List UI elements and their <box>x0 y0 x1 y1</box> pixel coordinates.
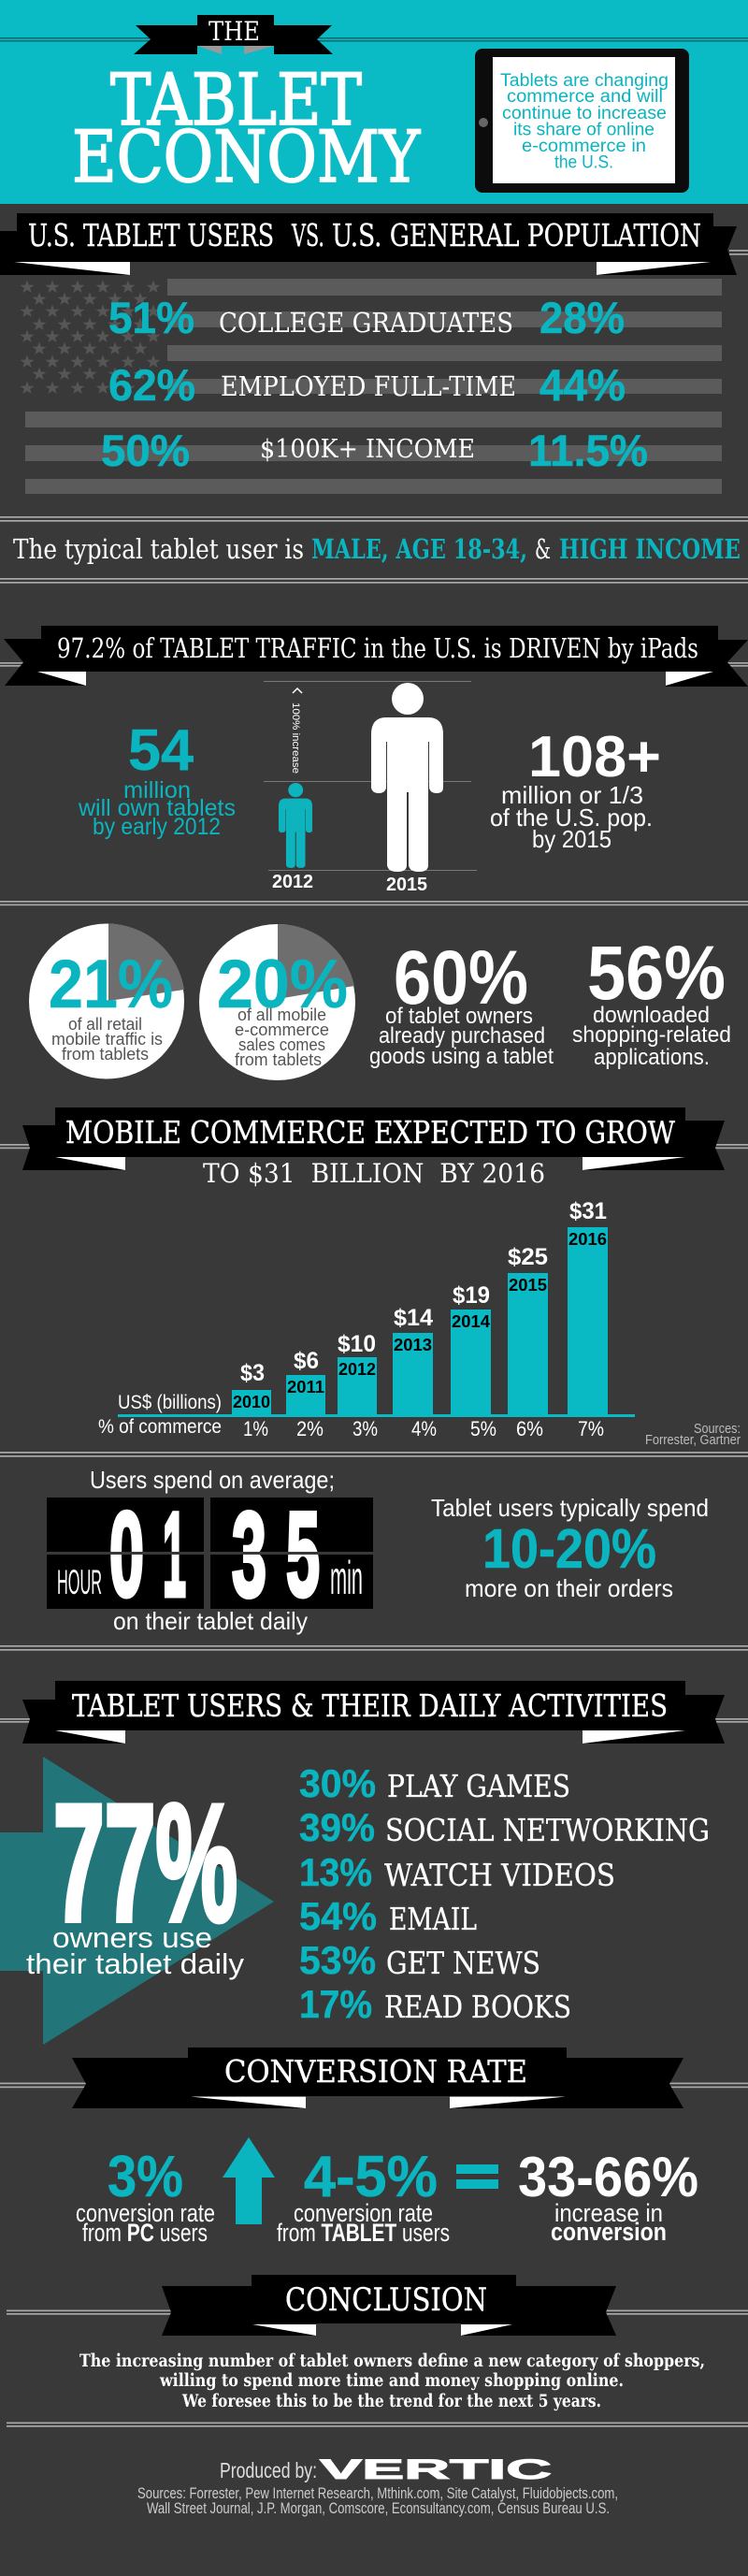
bar 2016: $31 <box>569 1198 607 1224</box>
icon: person 2012 <box>279 783 312 868</box>
stat: college graduates <box>108 293 625 342</box>
order spend panel: Tablet users typically spend <box>431 1494 709 1522</box>
activities list: 30% <box>299 1761 376 1805</box>
stat: PC conversion: conversion rate <box>76 2199 215 2227</box>
bar chart: mobile commerce: 7% <box>578 1417 604 1440</box>
bar 2012: $10 <box>338 1331 376 1357</box>
chart: people growth: 2012 <box>272 872 313 892</box>
arrow with 77%: their tablet daily <box>26 1947 245 1980</box>
bar 2011 <box>286 1348 325 1415</box>
activities list: 13% <box>299 1850 372 1894</box>
stat: conversion increase: 33-66% <box>518 2146 698 2208</box>
chart sources: Sources: <box>694 1421 741 1437</box>
tablet callout: commerce and will <box>507 87 663 107</box>
bar 2014: 2014 <box>452 1312 490 1331</box>
pie: 21%: mobile traffic is <box>51 1030 163 1049</box>
stat: 54 million: will own tablets <box>78 795 236 821</box>
stat: college graduates: 28% <box>539 293 625 342</box>
credits <box>137 2454 618 2517</box>
typical user statement: MALE, AGE 18-34, <box>311 533 527 565</box>
flag background <box>20 279 722 494</box>
chart sources <box>645 1421 741 1448</box>
bar chart: mobile commerce: 4% <box>411 1417 437 1440</box>
conclusion text <box>79 2351 705 2411</box>
stat: college graduates: 51% <box>108 293 194 342</box>
stat: employed full-time <box>108 360 626 410</box>
pie: 21%: from tablets <box>62 1045 149 1064</box>
title: TABLET <box>110 58 362 141</box>
pie: 20%: sales comes <box>238 1035 325 1054</box>
bar 2015: 2015 <box>509 1276 547 1295</box>
tablet callout: the U.S. <box>554 153 613 172</box>
stat: 108+ million: of the U.S. pop. <box>490 803 653 832</box>
bar chart: mobile commerce: US$ (billions) <box>118 1392 222 1413</box>
stat: 56% <box>572 931 731 1070</box>
bar chart: mobile commerce: 3% <box>352 1417 378 1440</box>
stat: 54 million: million <box>123 777 191 803</box>
pie: 21%: 21% <box>49 947 173 1022</box>
pie: 20%: 20% <box>217 947 348 1022</box>
bar 2013 <box>393 1305 433 1415</box>
stat: PC conversion <box>76 2145 215 2247</box>
flip clock: HOUR <box>57 1563 102 1601</box>
chart: people growth: 2015 <box>386 875 427 895</box>
bar 2015 <box>508 1244 548 1415</box>
stat: 60%: already purchased <box>379 1023 545 1049</box>
stat: 54 million <box>78 718 236 840</box>
stat: 108+ million: million or 1/3 <box>501 781 643 809</box>
arrow with 77%: 77% <box>53 1770 237 1956</box>
tablet callout: Tablets are changing <box>500 71 669 91</box>
chart: people growth <box>264 681 477 895</box>
tablet callout <box>475 49 689 193</box>
ribbon: conversion rate: CONVERSION RATE <box>224 2053 527 2090</box>
activities list: 54% <box>299 1894 377 1938</box>
order spend panel: 10-20% <box>482 1518 656 1580</box>
activities list: 39% <box>299 1805 375 1849</box>
bar 2014: $19 <box>453 1282 490 1309</box>
ribbon: conversion rate <box>72 2048 683 2108</box>
bar 2012: 2012 <box>338 1360 376 1379</box>
stat: 54 million: by early 2012 <box>93 814 221 840</box>
activities list: EMAIL <box>389 1901 477 1937</box>
stat: 60% <box>369 935 554 1069</box>
pie: 20% <box>199 924 355 1080</box>
bar 2010 <box>232 1360 271 1415</box>
ribbon: tablet users vs general population <box>0 213 737 275</box>
stat: 56%: downloaded <box>593 1003 710 1028</box>
increase annotation: 100% increase <box>290 702 301 774</box>
order spend panel <box>431 1494 709 1602</box>
bar chart: mobile commerce: 2% <box>296 1417 324 1440</box>
pie: 20%: of all mobile <box>237 1006 326 1024</box>
credits: Produced by: <box>220 2458 317 2482</box>
arrow with 77% <box>0 1757 274 2045</box>
ribbon: tablet users vs general population: VS. <box>291 217 324 253</box>
flip clock: 1 <box>163 1488 186 1622</box>
icon: equals sign <box>456 2164 498 2189</box>
sources: Sources: Forrester, Pew Internet Research, Mthink.com, Site Catalyst, Fluidobjects.com, <box>137 2484 618 2502</box>
ribbon: the <box>134 15 333 54</box>
bar chart: mobile commerce: 6% <box>516 1417 543 1440</box>
stat: income: 50% <box>101 426 190 475</box>
flip clock: min <box>330 1552 363 1604</box>
stat: PC conversion: 3% <box>108 2145 183 2209</box>
stat: 56%: shopping-related <box>572 1022 731 1048</box>
stat: tablet conversion <box>277 2145 450 2247</box>
stat: 56%: applications. <box>594 1045 710 1070</box>
stat: employed full-time: 62% <box>108 360 195 410</box>
stat: employed full-time: EMPLOYED FULL-TIME <box>221 370 516 402</box>
stat: income: 11.5% <box>528 426 648 475</box>
bar 2016 <box>568 1198 608 1415</box>
stat: conversion increase: conversion <box>551 2218 667 2246</box>
activities list: 53% <box>299 1938 376 1982</box>
activities list: GET NEWS <box>386 1945 540 1981</box>
activities list: 17% <box>299 1982 372 2026</box>
bar 2015: $25 <box>508 1244 548 1270</box>
conclusion text: willing to spend more time and money shopping online. <box>159 2370 624 2391</box>
activities list: SOCIAL NETWORKING <box>385 1812 710 1848</box>
typical user statement: & <box>535 533 551 565</box>
ribbon: conclusion <box>162 2275 616 2336</box>
logo: vertic: VERTIC <box>320 2454 552 2485</box>
ribbon: conclusion: CONCLUSION <box>285 2281 487 2319</box>
ribbon: tablet users vs general population: U.S. TABLET USERS <box>28 217 274 253</box>
bar 2010: $3 <box>240 1360 265 1386</box>
ribbon: ipad traffic <box>4 626 748 687</box>
comparison stats <box>101 293 648 475</box>
flip clock <box>47 1488 373 1622</box>
activities list: WATCH VIDEOS <box>384 1857 615 1893</box>
activities list: PLAY GAMES <box>387 1768 570 1804</box>
order spend panel: more on their orders <box>465 1574 673 1602</box>
stat: 60%: goods using a tablet <box>369 1044 554 1069</box>
stat: 108+ million: 108+ <box>528 725 661 789</box>
sources <box>137 2484 618 2517</box>
title <box>72 58 421 198</box>
stat: 54 million: 54 <box>128 718 194 783</box>
ribbon: the: THE <box>209 16 260 47</box>
stat: employed full-time: 44% <box>539 360 626 410</box>
subheading: to 31 billion: TO $31 BILLION BY 2016 <box>203 1158 545 1189</box>
conversion equation <box>76 2137 698 2247</box>
activities list <box>299 1761 710 2026</box>
bar chart: mobile commerce: 5% <box>470 1417 496 1440</box>
stat: 60%: 60% <box>394 935 528 1020</box>
bar 2013: $14 <box>394 1305 433 1331</box>
title: ECONOMY <box>72 115 421 198</box>
bar 2012 <box>338 1331 377 1415</box>
pie: 20%: e-commerce <box>235 1020 329 1039</box>
tablet callout: continue to increase <box>502 104 667 123</box>
stat: income <box>101 426 648 475</box>
pie: 21% <box>29 924 184 1079</box>
sources: Wall Street Journal, J.P. Morgan, Comscore, Econsultancy.com, Census Bureau U.S. <box>147 2499 610 2517</box>
tablet callout: e-commerce in <box>522 137 646 156</box>
stat: 108+ million: by 2015 <box>532 825 611 853</box>
time on tablet panel <box>47 1466 373 1635</box>
pie: 21%: of all retail <box>68 1015 142 1034</box>
icon: person 2015 <box>371 683 443 872</box>
stat: 56%: 56% <box>587 931 726 1016</box>
header panel <box>0 0 748 204</box>
ribbon: daily activities <box>22 1681 725 1744</box>
stat: tablet conversion: conversion rate <box>294 2199 433 2227</box>
typical user statement <box>13 533 741 565</box>
flip clock: 5 <box>286 1488 320 1622</box>
typical user statement: The typical tablet user is <box>13 533 304 565</box>
flip clock: 3 <box>232 1488 266 1622</box>
stat: college graduates: COLLEGE GRADUATES <box>219 307 513 339</box>
stat: PC conversion: from PC users <box>82 2219 208 2247</box>
stat: income: $100K+ INCOME <box>260 435 475 464</box>
conclusion text: We foresee this to be the trend for the next 5 years. <box>181 2391 601 2411</box>
icon: up arrow <box>223 2137 275 2224</box>
bar 2013: 2013 <box>394 1336 432 1354</box>
bar 2011: $6 <box>294 1348 319 1374</box>
bar chart: mobile commerce: % of commerce <box>98 1416 222 1438</box>
time on tablet panel: on their tablet daily <box>113 1607 308 1635</box>
pie: 20%: from tablets <box>235 1050 322 1069</box>
tablet callout: its share of online <box>513 120 654 140</box>
bar chart: mobile commerce: 1% <box>243 1417 268 1440</box>
bar 2016: 2016 <box>568 1230 607 1249</box>
stat: conversion increase <box>518 2146 698 2246</box>
bar 2014 <box>451 1282 491 1415</box>
stat: 108+ million <box>490 725 661 853</box>
activities list: READ BOOKS <box>384 1989 571 2025</box>
flip clock: 0 <box>109 1488 144 1622</box>
stat: tablet conversion: from TABLET users <box>277 2219 450 2247</box>
stat: conversion increase: increase in <box>554 2199 663 2227</box>
ribbon: mobile commerce <box>22 1107 725 1170</box>
bar 2011: 2011 <box>287 1378 324 1397</box>
bar chart: mobile commerce <box>98 1198 741 1448</box>
bar 2010: 2010 <box>233 1393 270 1411</box>
arrow with 77%: owners use <box>52 1921 212 1954</box>
stat: tablet conversion: 4-5% <box>304 2145 438 2209</box>
time on tablet panel: Users spend on average; <box>90 1466 335 1494</box>
stat: 60%: of tablet owners <box>385 1004 533 1029</box>
